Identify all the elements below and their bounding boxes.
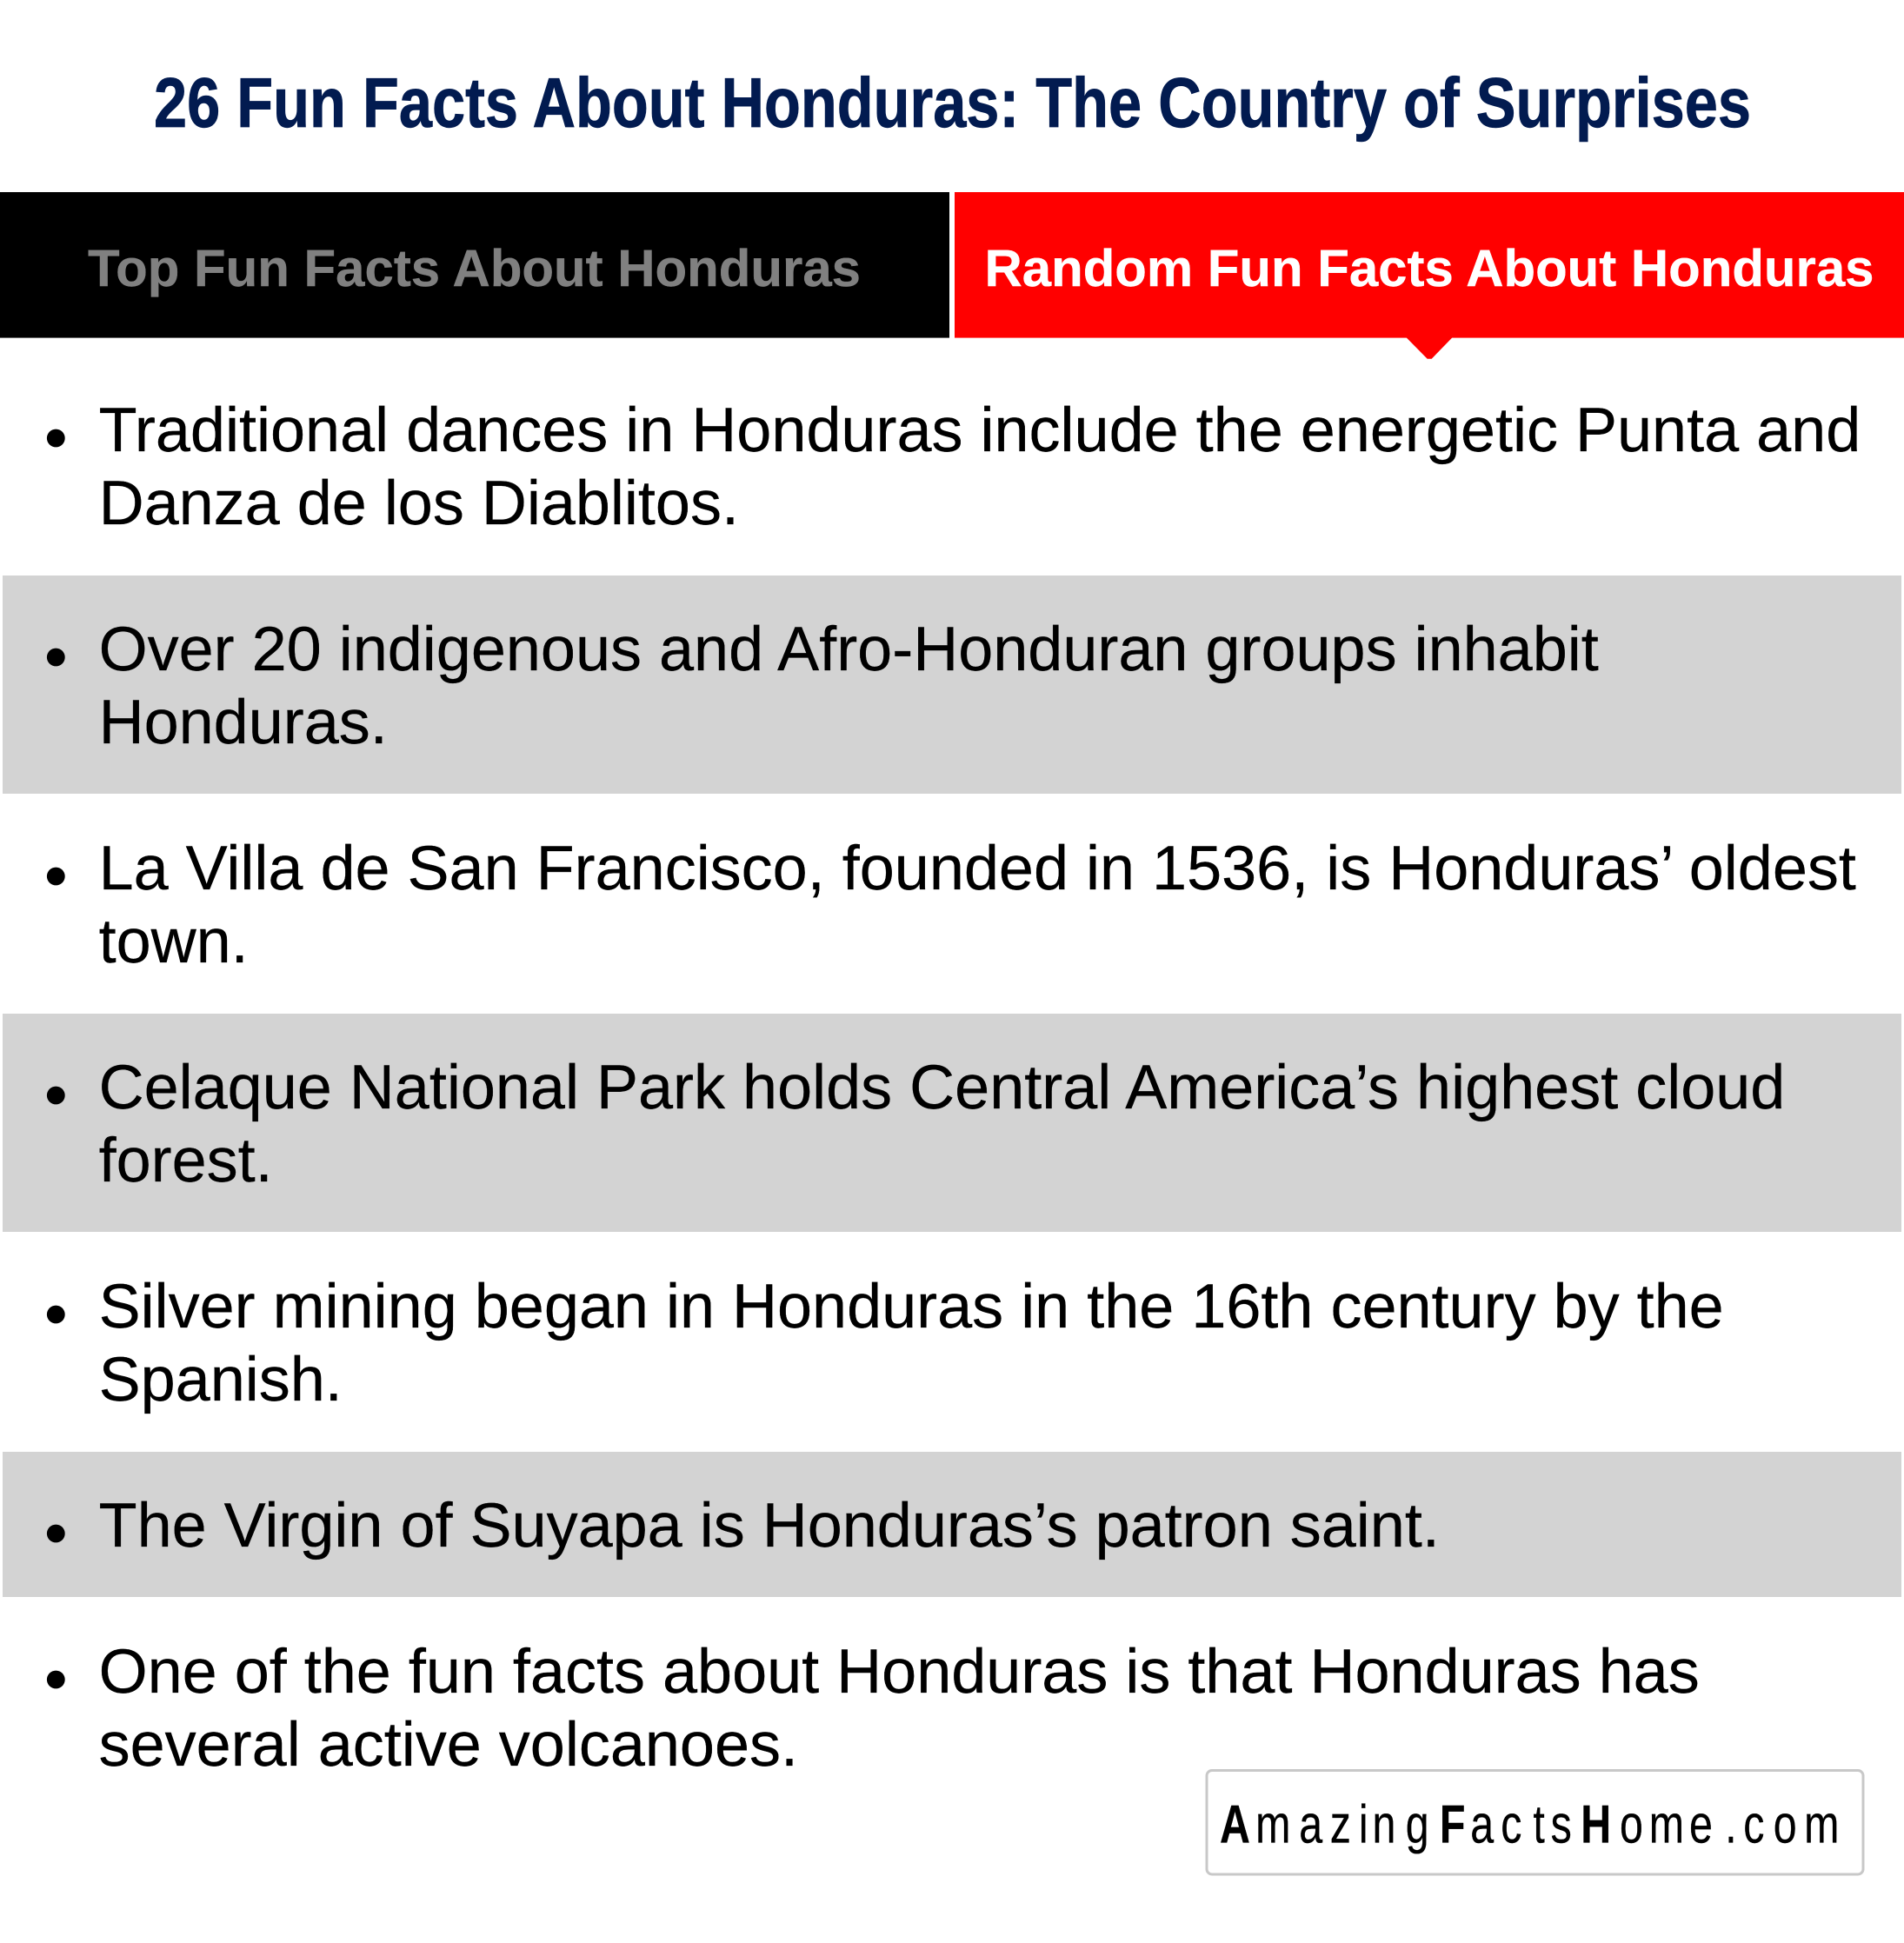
fact 1: Traditional dances in Honduras include the energetic Punta and: [99, 396, 1861, 465]
watermark logo: acts: [1470, 1794, 1572, 1854]
watermark logo: H: [1581, 1794, 1611, 1854]
fact 3: [47, 834, 1856, 976]
watermark logo: F: [1440, 1794, 1465, 1854]
fact 4 panel: Celaque National Park holds Central America’s highest cloud: [99, 1053, 1785, 1122]
watermark logo: mazing: [1255, 1794, 1429, 1854]
fact 5: Spanish.: [99, 1345, 343, 1414]
fact 3: La Villa de San Francisco, founded in 1536, is Honduras’ oldest: [99, 834, 1856, 903]
fact 4 panel: forest.: [99, 1126, 273, 1195]
fact 2 panel: [3, 576, 1901, 794]
fact 7: several active volcanoes.: [99, 1710, 798, 1780]
fact 2 panel: Honduras.: [99, 688, 388, 757]
tab: random fun facts (active): Random Fun Facts About Honduras: [984, 239, 1874, 297]
watermark logo: [1207, 1770, 1863, 1874]
fact 4 panel: [3, 1014, 1901, 1232]
fact 1: Danza de los Diablitos.: [99, 469, 739, 538]
tab: random fun facts (active): [955, 192, 1904, 359]
fact 6 panel: [3, 1452, 1901, 1597]
tab: top fun facts: Top Fun Facts About Honduras: [88, 239, 861, 297]
fact 6 panel: The Virgin of Suyapa is Honduras’s patron saint.: [99, 1491, 1440, 1560]
fact 5: Silver mining began in Honduras in the 16th century by the: [99, 1272, 1724, 1341]
fact 5: [47, 1272, 1724, 1414]
fact 3: town.: [99, 907, 249, 976]
fact 1: [47, 396, 1861, 538]
fact 2 panel: Over 20 indigenous and Afro-Honduran groups inhabit: [99, 615, 1599, 684]
watermark logo: A: [1220, 1794, 1250, 1854]
watermark logo: ome.com: [1620, 1794, 1839, 1854]
fact 7: One of the fun facts about Honduras is that Honduras has: [99, 1637, 1700, 1707]
fact 7: [47, 1637, 1700, 1780]
tab: top fun facts: [0, 192, 949, 338]
